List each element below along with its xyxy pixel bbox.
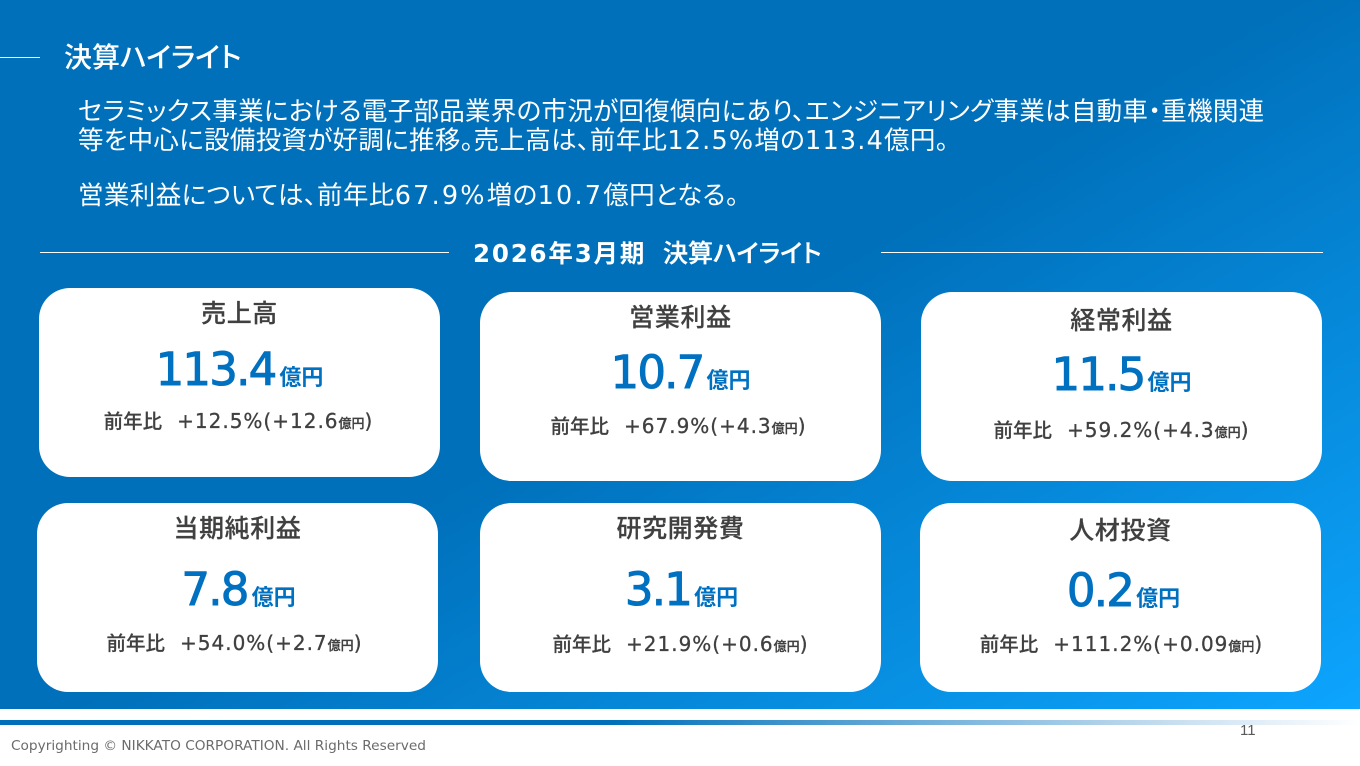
summary text [78,97,1264,211]
summary text: セラミックス事業における電子部品業界の市況が回復傾向にあり、エンジニアリング事業は自動車・重機関連 [78,97,1264,127]
card: 売上高: 売上高 [201,299,278,328]
section heading [473,239,821,268]
card: 営業利益: 前年比 +67.9%(+4.3億円) [550,414,806,438]
card: 営業利益: 営業利益 [629,303,732,332]
card: 研究開発費: 前年比 +21.9%(+0.6億円) [552,632,808,656]
card: 売上高: 113.4億円 [156,343,323,396]
footer gradient bar [0,720,1360,725]
summary text: 営業利益については、前年比67.9%増の10.7億円となる。 [78,181,739,211]
section heading: 2026年3月期 [473,239,646,268]
header rule [0,57,40,58]
title: 決算ハイライト [64,41,241,74]
summary text: 等を中心に設備投資が好調に推移。売上高は、前年比12.5%増の113.4億円。 [78,126,949,156]
card: 経常利益 [921,292,1322,481]
card: 当期純利益: 前年比 +54.0%(+2.7億円) [106,631,362,655]
card: 売上高 [39,288,440,477]
card: 人材投資: 人材投資 [1069,516,1172,545]
copyright: Copyrighting © NIKKATO CORPORATION. All Rights Reserved [11,738,426,754]
card: 人材投資: 前年比 +111.2%(+0.09億円) [980,632,1263,656]
card: 人材投資: 0.2億円 [1067,564,1180,617]
card: 営業利益 [480,292,881,481]
card: 研究開発費 [480,503,881,692]
card: 経常利益: 経常利益 [1070,306,1173,335]
card: 当期純利益: 7.8億円 [181,563,296,616]
card: 経常利益: 前年比 +59.2%(+4.3億円) [993,418,1250,442]
card: 当期純利益 [37,503,438,692]
card: 経常利益: 11.5億円 [1051,348,1192,401]
page number: 11 [1240,722,1256,739]
section heading: 決算ハイライト [663,239,821,268]
card: 人材投資 [920,503,1321,692]
card: 売上高: 前年比 +12.5%(+12.6億円) [104,409,373,433]
card: 営業利益: 10.7億円 [610,346,750,399]
card: 研究開発費: 3.1億円 [625,563,738,616]
card: 当期純利益: 当期純利益 [173,514,302,543]
card: 研究開発費: 研究開発費 [616,514,744,543]
